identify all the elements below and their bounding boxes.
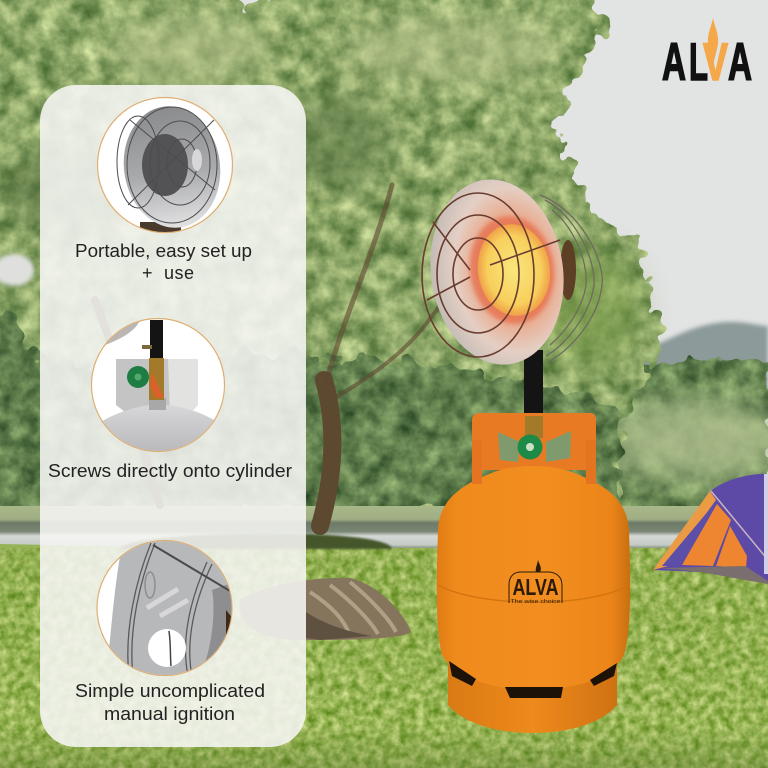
misty forest highlights [600, 398, 768, 482]
caption: cylinder: Screws directly onto cylinder [48, 461, 292, 481]
distant mountain [640, 322, 768, 400]
thumbnail: valve on silver cylinder [92, 318, 226, 452]
feature 3: manual ignition [75, 540, 265, 724]
logo: ALVA top right: V [703, 33, 728, 92]
product: gas heater on orange cylinder [419, 171, 630, 733]
far forest on lake shore [590, 359, 768, 515]
cylinder collar side bars [472, 440, 596, 484]
cylinder ALVA label: ALVA [512, 574, 558, 600]
cylinder ALVA label: The wise choice [510, 599, 561, 605]
left sky gap [0, 254, 34, 286]
heater dish [419, 171, 575, 373]
canopy light and shade patches [0, 15, 640, 370]
cylinder foot slots [449, 661, 617, 698]
heater front guard wires [422, 193, 560, 357]
lake shrub [120, 533, 392, 549]
lower canopy shade [0, 308, 620, 512]
thumbnail: heater front [98, 98, 232, 236]
logo: ALVA top right: A [728, 33, 752, 92]
tent [653, 474, 768, 584]
heater rear housing [560, 240, 576, 300]
logo: ALVA top right [662, 18, 752, 92]
feature 2: screws onto cylinder [48, 318, 292, 481]
lake water [0, 506, 768, 550]
green valve handle [518, 434, 542, 460]
icon: logo flame [708, 18, 718, 66]
logo: ALVA top right: A [662, 33, 686, 92]
thumbnail: ignition hole close-up [97, 540, 240, 680]
heater support pole [524, 350, 543, 416]
main tree canopy [0, 0, 664, 512]
heater burner [463, 211, 561, 329]
boulder [239, 578, 411, 640]
cylinder collar back plate [472, 413, 596, 470]
caption: portable: + use [142, 263, 194, 283]
caption: portable: Portable, easy set up [75, 241, 252, 261]
cylinder body [437, 466, 630, 690]
heater rear wire cage [540, 195, 602, 362]
cylinder weld seam [438, 585, 629, 602]
caption: ignition: manual ignition [104, 704, 235, 724]
panel: features [40, 85, 306, 747]
logo: ALVA top right: L [689, 33, 708, 92]
cylinder ALVA label [509, 560, 562, 605]
cylinder foot ring [448, 650, 617, 733]
feature 1: portable [75, 98, 252, 283]
brass valve connector [525, 416, 543, 438]
grass lawn [0, 544, 768, 768]
tree trunk and branches [95, 185, 440, 526]
caption: ignition: Simple uncomplicated [75, 681, 265, 701]
